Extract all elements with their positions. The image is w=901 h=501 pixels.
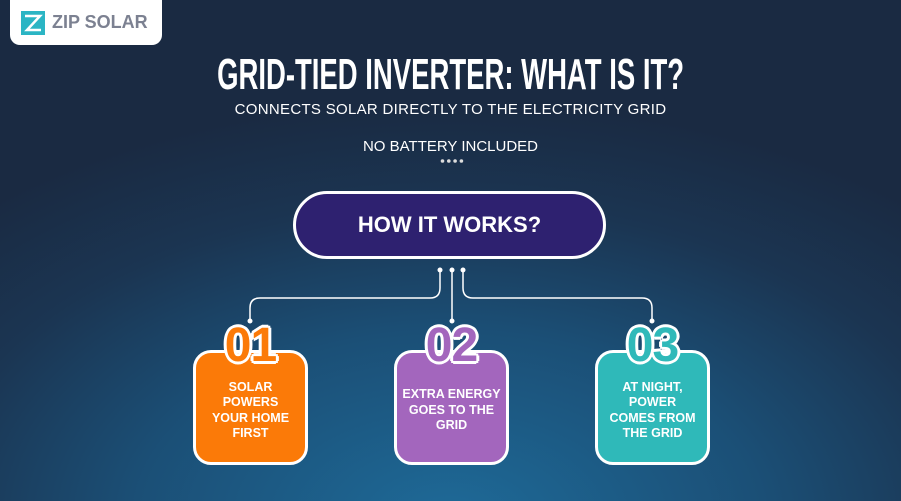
step 2: EXTRA ENERGY GOES TO THE GRID: [402, 387, 501, 432]
step 1: [193, 350, 308, 465]
logo: [10, 0, 162, 45]
note: NO BATTERY INCLUDED: [363, 138, 538, 155]
dots: [440, 159, 464, 163]
step 3: [595, 350, 710, 465]
step 1: SOLAR: [229, 380, 272, 394]
title: GRID-TIED INVERTER: WHAT IS IT?: [217, 50, 684, 99]
number 03: 03: [627, 319, 678, 372]
step 1: FIRST: [232, 426, 269, 440]
number 02: 02: [426, 319, 477, 372]
button: how it works: HOW IT WORKS?: [358, 212, 541, 237]
button: how it works: [293, 191, 606, 259]
step 1: YOUR HOME: [212, 410, 289, 424]
step 3: COMES FROM: [609, 410, 696, 424]
step 2: [394, 350, 509, 465]
subtitle: CONNECTS SOLAR DIRECTLY TO THE ELECTRICITY GRID: [235, 101, 666, 118]
step 1: POWERS: [223, 395, 278, 409]
logo: ZIP SOLAR: [52, 12, 148, 32]
step 3: POWER: [629, 395, 676, 409]
icon: logo mark: [21, 11, 45, 35]
number 01: 01: [225, 319, 276, 372]
step 3: THE GRID: [623, 426, 682, 440]
step 3: AT NIGHT,: [622, 380, 683, 394]
